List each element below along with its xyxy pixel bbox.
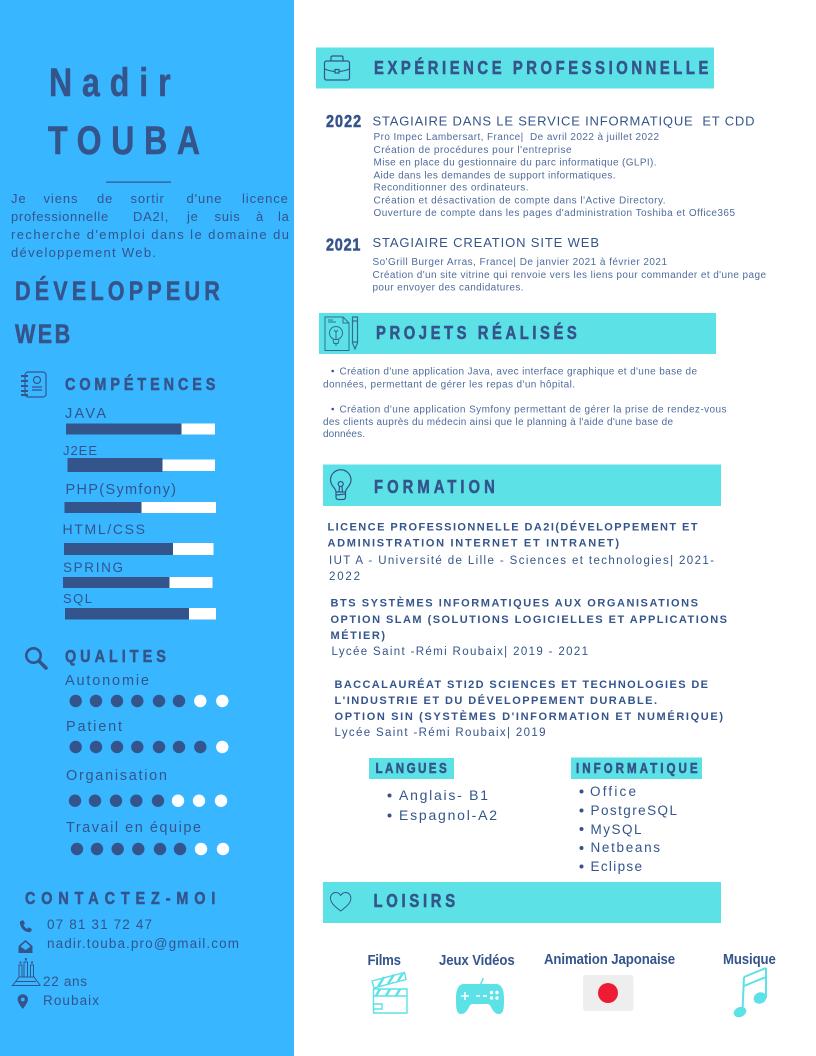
formation: licence: LICENCE PROFESSIONNELLE DA2I(DÉVELOPPEMENT ET	[328, 521, 698, 534]
quality: travail en equipe	[66, 820, 229, 855]
intro paragraph: à	[256, 209, 264, 224]
skill: java: JAVA	[65, 406, 106, 422]
skills bars	[62, 406, 216, 620]
projects text: Création d'une application Symfony permettant de gérer la prise de rendez-vous	[340, 404, 726, 415]
skill: php	[64, 482, 216, 513]
banner: loisirs	[323, 882, 721, 923]
job title	[15, 276, 220, 350]
icon: heart	[330, 892, 351, 911]
icon: magnifier	[26, 648, 46, 668]
icon: phone	[20, 920, 32, 932]
formation: licence	[328, 521, 714, 583]
banner: experience: EXPÉRIENCE PROFESSIONNELLE	[374, 57, 708, 78]
contact heading: CONTACTEZ-MOI	[25, 889, 215, 908]
intro paragraph: suis	[214, 209, 240, 224]
formation: bts: MÉTIER)	[330, 629, 385, 642]
job title: WEB	[15, 320, 70, 350]
experience 2022: Pro Impec Lambersart, France| De avril 2022 à juillet 2022	[374, 132, 659, 143]
quality: patient: Patient	[66, 719, 122, 735]
projects text: données.	[323, 429, 365, 440]
experience 2022: Aide dans les demandes de support informatiques.	[374, 170, 616, 182]
formation: baccalaureat	[334, 678, 723, 739]
langues heading: LANGUES	[376, 760, 447, 776]
intro paragraph: Je	[11, 191, 27, 206]
icon: document with bulb and pencil	[325, 317, 358, 350]
intro paragraph: licence	[242, 191, 289, 206]
experience 2021: So'Grill Burger Arras, France| De janvier 2021 à février 2021	[372, 257, 667, 268]
icon: game controller	[456, 978, 504, 1014]
informatique list: Netbeans	[590, 840, 660, 855]
icon: briefcase	[324, 56, 350, 80]
left sidebar panel	[0, 0, 294, 1056]
icon: light bulb	[330, 470, 351, 500]
skill: php: PHP(Symfony)	[66, 482, 176, 498]
intro paragraph: DA2I,	[133, 209, 169, 224]
email address: nadir.touba.pro@gmail.com	[47, 936, 239, 951]
experience 2021	[326, 235, 766, 293]
skill: html css	[62, 521, 214, 555]
intro paragraph: développement Web.	[11, 245, 156, 260]
intro paragraph: recherche d'emploi dans le domaine du	[11, 227, 289, 242]
experience 2021: STAGIAIRE CREATION SITE WEB	[372, 235, 599, 250]
projects text: données, permettant de gérer les repas d'un hôpital.	[323, 379, 575, 390]
intro paragraph: la	[278, 209, 290, 224]
hobby: musique: Musique	[723, 950, 776, 967]
experience 2022: STAGIAIRE DANS LE SERVICE INFORMATIQUE ET CDD	[372, 114, 754, 128]
intro paragraph: je	[186, 209, 199, 224]
formation: bts: Lycée Saint -Rémi Roubaix| 2019 - 2021	[332, 646, 588, 658]
competences heading: COMPÉTENCES	[65, 373, 216, 394]
formation: baccalaureat: L'INDUSTRIE ET DU DÉVELOPPEMENT DURABLE.	[334, 694, 657, 707]
formation: baccalaureat: BACCALAURÉAT STI2D SCIENCES ET TECHNOLOGIES DE	[334, 678, 708, 691]
skill: sql	[63, 591, 216, 620]
job title: DÉVELOPPEUR	[15, 276, 220, 307]
experience 2022: 2022	[326, 112, 361, 131]
formation: baccalaureat: Lycée Saint -Rémi Roubaix| 2019	[334, 727, 546, 739]
langues list	[388, 787, 497, 823]
hobby: films: Films	[368, 951, 401, 968]
hobby: animation japonaise: Animation Japonaise	[544, 950, 675, 967]
icon: japan flag	[583, 975, 634, 1011]
skill: java	[65, 406, 215, 434]
skill: j2ee	[63, 443, 215, 472]
hobby: jeux videos	[439, 951, 515, 1014]
intro paragraph	[11, 191, 290, 260]
informatique heading: INFORMATIQUE	[576, 760, 698, 776]
informatique list: PostgreSQL	[590, 803, 677, 818]
quality: autonomie	[65, 673, 228, 707]
quality: travail en equipe: Travail en équipe	[66, 820, 201, 836]
skill: html css: HTML/CSS	[62, 521, 145, 537]
langues heading	[369, 758, 454, 779]
formation: bts	[330, 597, 727, 658]
experience 2022: Mise en place du gestionnaire du parc informatique (GLPI).	[374, 158, 656, 168]
banner: loisirs: LOISIRS	[374, 890, 455, 911]
formation: bts: OPTION SLAM (SOLUTIONS LOGICIELLES ET APPLICATIONS	[330, 614, 727, 626]
experience 2021: 2021	[326, 235, 360, 255]
quality: patient	[66, 719, 228, 753]
hobby: musique	[723, 950, 776, 1019]
experience 2022: Création de procédures pour l'entreprise	[374, 145, 572, 156]
informatique list: Eclipse	[590, 859, 642, 874]
city: Roubaix	[43, 993, 99, 1008]
intro paragraph: d'une	[186, 191, 222, 206]
experience 2021: Création d'un site vitrine qui renvoie vers les liens pour commander et d'une page	[372, 270, 766, 281]
qualites heading: QUALITES	[65, 647, 166, 666]
banner: projets	[319, 313, 716, 354]
intro paragraph: de	[97, 191, 113, 206]
name heading	[48, 60, 200, 163]
banner: formation	[323, 464, 721, 506]
hobby: animation japonaise	[544, 950, 675, 1011]
icon: music notes	[732, 968, 768, 1019]
age: 22 ans	[43, 974, 87, 989]
langues list: Espagnol-A2	[399, 807, 497, 823]
banner: projets: PROJETS RÉALISÉS	[376, 322, 577, 343]
quality: organisation: Organisation	[66, 768, 167, 784]
skill: j2ee: J2EE	[63, 443, 97, 458]
projects text: des clients auprès du médecin ainsi que le planning à l'aide d'une base de	[323, 417, 673, 428]
name heading: TOUBA	[48, 118, 200, 163]
icon: address book	[21, 372, 46, 397]
experience 2022	[326, 112, 754, 219]
skill: spring: SPRING	[63, 560, 123, 575]
icon: envelope	[18, 940, 32, 953]
informatique list	[580, 784, 677, 874]
experience 2022: Création et désactivation de compte dans l'Active Directory.	[374, 196, 666, 206]
skill: sql: SQL	[63, 591, 92, 606]
formation: licence: 2022	[329, 571, 360, 583]
projects text	[323, 366, 726, 440]
formation: bts: BTS SYSTÈMES INFORMATIQUES AUX ORGANISATIONS	[330, 597, 698, 610]
experience 2022: Reconditionner des ordinateurs.	[374, 182, 528, 194]
intro paragraph: professionnelle	[11, 209, 109, 224]
icon: location pin	[18, 994, 28, 1009]
experience 2021: pour envoyer des candidatures.	[372, 282, 524, 293]
name heading: Nadir	[49, 60, 171, 105]
icon: birthday cake	[12, 958, 40, 986]
hobby: jeux videos: Jeux Vidéos	[439, 951, 515, 968]
banner: experience	[316, 48, 714, 88]
informatique list: Office	[590, 784, 636, 799]
hobby: films	[368, 951, 407, 1013]
intro paragraph: viens	[44, 191, 78, 206]
icon: clapperboard	[372, 972, 407, 1013]
informatique list: MySQL	[590, 822, 642, 837]
formation: licence: IUT A - Université de Lille - Sciences et technologies| 2021-	[329, 555, 714, 567]
quality: organisation	[66, 768, 227, 807]
banner: formation: FORMATION	[374, 476, 495, 497]
formation: licence: ADMINISTRATION INTERNET ET INTRANET)	[328, 538, 619, 550]
intro paragraph: sortir	[130, 191, 165, 206]
langues list: Anglais- B1	[399, 787, 488, 803]
phone number: 07 81 31 72 47	[47, 917, 152, 932]
quality: autonomie: Autonomie	[65, 673, 149, 689]
skill: spring	[63, 560, 212, 588]
formation: baccalaureat: OPTION SIN (SYSTÈMES D'INFORMATION ET NUMÉRIQUE)	[334, 710, 723, 723]
experience 2022: Ouverture de compte dans les pages d'administration Toshiba et Office365	[374, 208, 735, 219]
projects text: Création d'une application Java, avec interface graphique et d'une base de	[340, 366, 697, 377]
